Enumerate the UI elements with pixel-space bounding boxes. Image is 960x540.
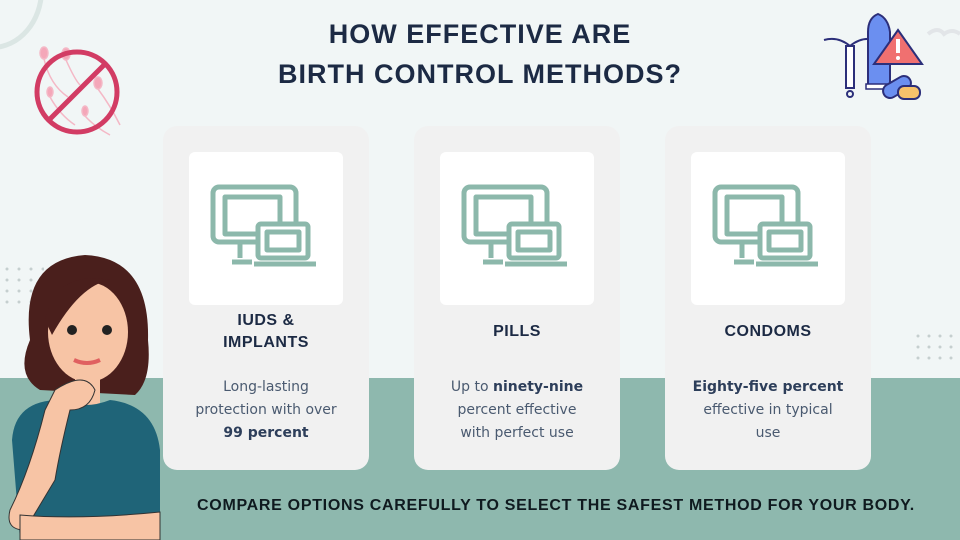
title: HOW EFFECTIVE ARE <box>329 19 631 49</box>
text: percent effective <box>458 402 576 418</box>
icon: devices <box>440 152 594 305</box>
text: 99 percent <box>223 425 309 441</box>
text: effective in typical <box>703 402 833 418</box>
illustration: thinking woman <box>8 255 160 540</box>
dots left <box>6 268 44 304</box>
footer message: COMPARE OPTIONS CAREFULLY TO SELECT THE SAFEST METHOD FOR YOUR BODY. <box>197 497 915 514</box>
icon: no sperm <box>34 46 120 136</box>
icon: devices <box>189 152 343 305</box>
dots right <box>916 334 952 360</box>
text <box>451 379 583 441</box>
text: Long-lasting <box>223 379 309 395</box>
heading: IMPLANTS <box>223 334 309 351</box>
heading: IUDS & <box>237 312 295 329</box>
text: use <box>756 425 780 441</box>
panel: condoms <box>665 126 871 470</box>
text: with perfect use <box>460 425 574 441</box>
text: Eighty-five percent <box>693 379 843 395</box>
heading: PILLS <box>493 323 541 340</box>
panel: pills <box>414 126 620 470</box>
text <box>195 379 337 441</box>
text: protection with over <box>195 402 337 418</box>
icon: contraceptives <box>824 12 960 100</box>
decorative circle top-left <box>0 0 44 50</box>
text: Up to ninety-nine <box>451 379 583 395</box>
panel: IUDs & implants <box>163 126 369 470</box>
title: BIRTH CONTROL METHODS? <box>278 59 682 89</box>
heading <box>223 312 309 351</box>
icon: devices <box>691 152 845 305</box>
text <box>693 379 843 441</box>
title <box>278 19 682 89</box>
heading: CONDOMS <box>724 323 812 340</box>
